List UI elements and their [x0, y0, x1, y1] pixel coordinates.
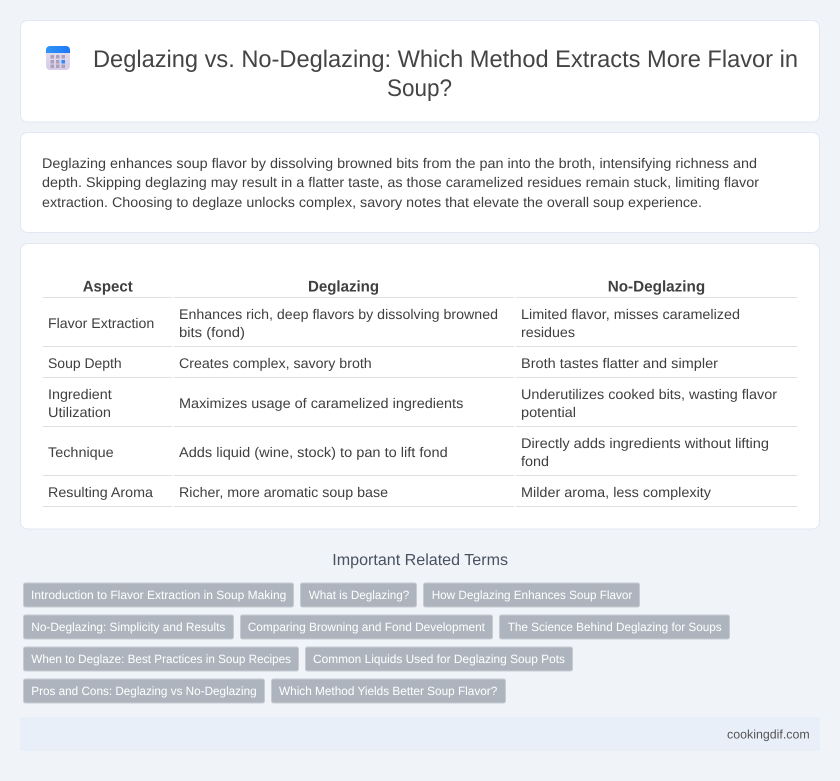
table row: soup depth	[43, 355, 797, 378]
tag: Which Method Yields Better Soup Flavor?	[279, 684, 498, 698]
table row: soup depth: Broth tastes flatter and simpler	[521, 355, 718, 371]
table header: No-Deglazing	[608, 278, 705, 296]
table header	[43, 278, 797, 298]
panel: related term tags	[24, 583, 730, 703]
table row: technique: Adds liquid (wine, stock) to pan to lift fond	[179, 444, 448, 460]
text block: introduction paragraph: extraction. Choosing to deglaze unlocks complex, savory notes that elevate the overall soup experience.	[42, 194, 702, 210]
table row: flavor extraction	[43, 306, 797, 347]
footer: cookingdif.com	[727, 727, 810, 741]
text block: introduction paragraph: depth. Skipping deglazing may result in a flatter taste, as those caramelized residues remain stuck, limiting flavor	[42, 174, 759, 190]
table row: ingredient utilization	[43, 386, 797, 427]
panel: introduction	[20, 132, 820, 232]
table header: Aspect	[83, 278, 133, 296]
table row: ingredient utilization: potential	[521, 404, 576, 420]
table row: resulting aroma: Milder aroma, less complexity	[521, 484, 711, 500]
tag	[424, 583, 640, 607]
table row: flavor extraction: Enhances rich, deep flavors by dissolving browned	[179, 306, 498, 322]
tag	[300, 583, 416, 607]
table row: resulting aroma: Resulting Aroma	[48, 484, 153, 500]
tag: The Science Behind Deglazing for Soups	[508, 620, 722, 634]
table row: flavor extraction: Flavor Extraction	[48, 315, 154, 331]
table row: ingredient utilization: Utilization	[48, 404, 111, 420]
table row: ingredient utilization: Ingredient	[48, 386, 112, 402]
title: Deglazing vs. No-Deglazing: Which Method Extracts More Flavor in	[93, 46, 798, 73]
tag	[24, 583, 294, 607]
heading: important related terms: Important Related Terms	[332, 552, 508, 569]
tag: What is Deglazing?	[309, 588, 410, 602]
tag	[272, 679, 506, 703]
tag: Introduction to Flavor Extraction in Soup Making	[31, 588, 286, 602]
table header: Deglazing	[308, 278, 379, 296]
tag	[24, 679, 264, 703]
title: Soup?	[387, 75, 452, 102]
table row: soup depth: Creates complex, savory broth	[179, 355, 372, 371]
tag	[240, 615, 492, 639]
tag: Common Liquids Used for Deglazing Soup Pots	[313, 652, 565, 666]
table row: technique: Technique	[48, 444, 114, 460]
table row: flavor extraction: bits (fond)	[179, 324, 245, 340]
table row: technique	[43, 435, 797, 476]
footer	[20, 717, 820, 751]
tag: No-Deglazing: Simplicity and Results	[31, 620, 225, 634]
tag: When to Deglaze: Best Practices in Soup Recipes	[31, 652, 291, 666]
tag	[500, 615, 730, 639]
tag: Comparing Browning and Fond Development	[248, 620, 486, 634]
table row: flavor extraction: Limited flavor, misses caramelized	[521, 306, 740, 322]
table row: technique: fond	[521, 453, 549, 469]
tag	[306, 647, 572, 671]
table row: resulting aroma	[43, 484, 797, 507]
panel: title card	[20, 20, 820, 122]
tag	[24, 647, 298, 671]
panel: comparison table	[20, 244, 820, 529]
table row: resulting aroma: Richer, more aromatic soup base	[179, 484, 388, 500]
icon: calendar	[46, 46, 70, 70]
table row: soup depth: Soup Depth	[48, 355, 122, 371]
table row: technique: Directly adds ingredients without lifting	[521, 435, 769, 451]
text block: introduction paragraph: Deglazing enhances soup flavor by dissolving browned bits from the pan into the broth, intensifying richness and	[42, 155, 757, 171]
table row: flavor extraction: residues	[521, 324, 575, 340]
table row: ingredient utilization: Maximizes usage of caramelized ingredients	[179, 395, 463, 411]
tag: Pros and Cons: Deglazing vs No-Deglazing	[31, 684, 257, 698]
table row: ingredient utilization: Underutilizes cooked bits, wasting flavor	[521, 386, 777, 402]
tag	[24, 615, 234, 639]
tag: How Deglazing Enhances Soup Flavor	[432, 588, 632, 602]
